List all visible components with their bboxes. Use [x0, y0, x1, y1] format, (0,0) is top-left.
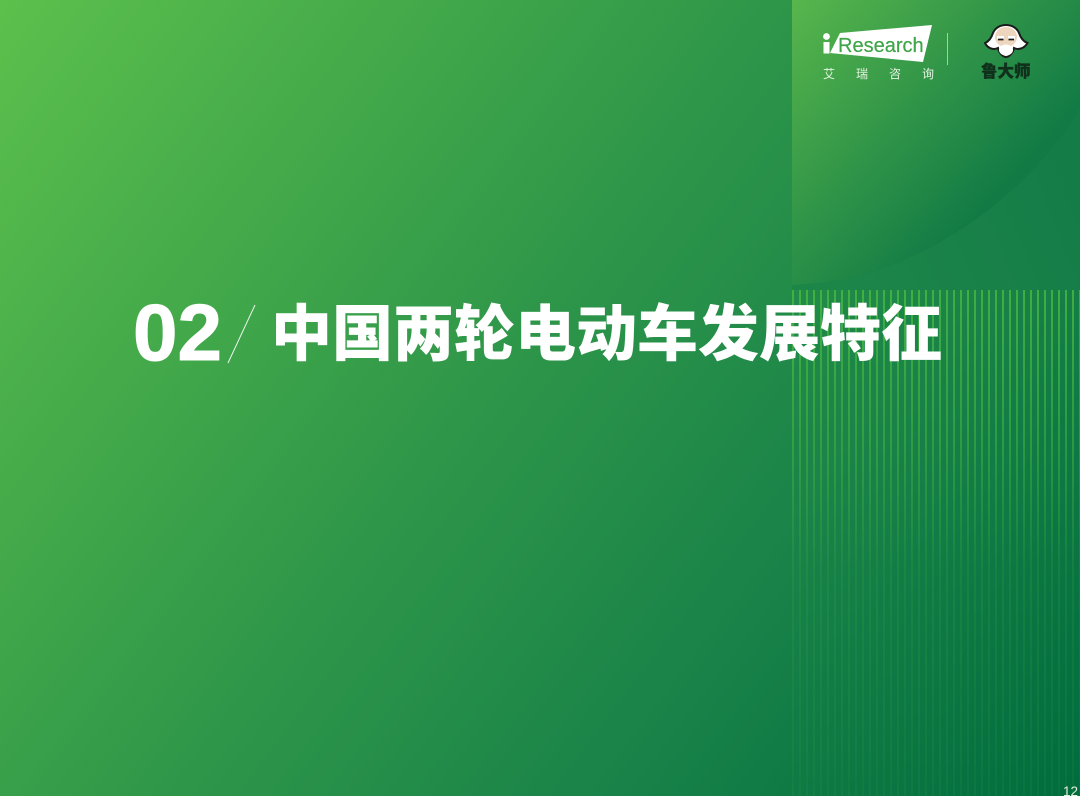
logo: Chinese company name: 咨	[889, 65, 901, 82]
logo: iResearch: Research	[838, 35, 924, 57]
title: 中国两轮电动车发展特征	[271, 284, 942, 373]
logo: Chinese company name: 询	[922, 65, 934, 82]
logo: iResearch	[823, 25, 932, 62]
logo: Chinese company name: 艾	[823, 65, 835, 82]
logo: Chinese company name	[823, 65, 934, 82]
slash divider	[228, 304, 256, 364]
logo divider	[947, 33, 948, 65]
icon: master mascot	[984, 24, 1029, 58]
section number: 02	[133, 288, 222, 377]
logo: Chinese company name: 瑞	[856, 65, 868, 82]
decorative top right panel	[792, 0, 1080, 266]
decorative vertical stripes	[792, 290, 1080, 688]
logo: mascot brand name: 鲁大师	[981, 58, 1030, 82]
